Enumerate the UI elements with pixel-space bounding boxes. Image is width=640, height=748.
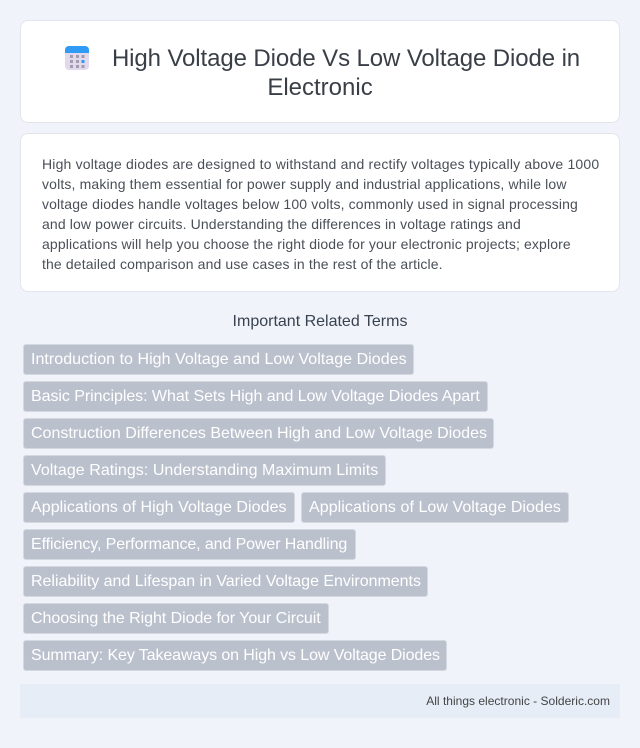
title: Electronic — [267, 74, 373, 101]
heading: important related terms: Important Related Terms — [233, 313, 407, 330]
tag: Reliability and Lifespan in Varied Voltage Environments — [31, 573, 421, 590]
footer text: All things electronic - Solderic.com — [426, 694, 610, 708]
tag: Voltage Ratings: Understanding Maximum Limits — [31, 462, 378, 479]
tag — [23, 566, 428, 597]
title — [112, 45, 580, 101]
tag — [23, 529, 356, 560]
footer bar — [20, 684, 620, 718]
tag: Applications of High Voltage Diodes — [31, 499, 287, 516]
intro text: the detailed comparison and use cases in the rest of the article. — [42, 256, 443, 272]
tag — [23, 603, 329, 634]
header panel — [20, 20, 620, 123]
tag — [23, 344, 414, 375]
tag: Construction Differences Between High and Low Voltage Diodes — [31, 425, 487, 442]
title: High Voltage Diode Vs Low Voltage Diode in — [112, 45, 580, 72]
tag: Basic Principles: What Sets High and Low Voltage Diodes Apart — [31, 388, 480, 405]
intro text: voltage diodes handle voltages below 100 volts, commonly used in signal processing — [42, 196, 578, 212]
tag: Applications of Low Voltage Diodes — [309, 499, 561, 516]
intro text: and low power circuits. Understanding the differences in voltage ratings and — [42, 216, 521, 232]
tag — [23, 455, 386, 486]
intro text: applications will help you choose the right diode for your electronic projects; explore — [42, 236, 571, 252]
tag: Introduction to High Voltage and Low Voltage Diodes — [31, 351, 407, 368]
tag — [23, 381, 488, 412]
intro panel — [20, 133, 620, 292]
tag — [23, 418, 494, 449]
tag list — [23, 344, 569, 671]
tag: Summary: Key Takeaways on High vs Low Voltage Diodes — [31, 647, 440, 664]
intro text: High voltage diodes are designed to withstand and rectify voltages typically above 1000 — [42, 156, 599, 172]
icon: calendar — [65, 46, 89, 70]
intro text — [42, 156, 599, 272]
tag — [23, 492, 295, 523]
tag — [301, 492, 569, 523]
tag: Efficiency, Performance, and Power Handling — [31, 536, 347, 553]
tag: Choosing the Right Diode for Your Circuit — [31, 610, 321, 627]
intro text: volts, making them essential for power supply and industrial applications, while low — [42, 176, 567, 192]
tag — [23, 640, 447, 671]
